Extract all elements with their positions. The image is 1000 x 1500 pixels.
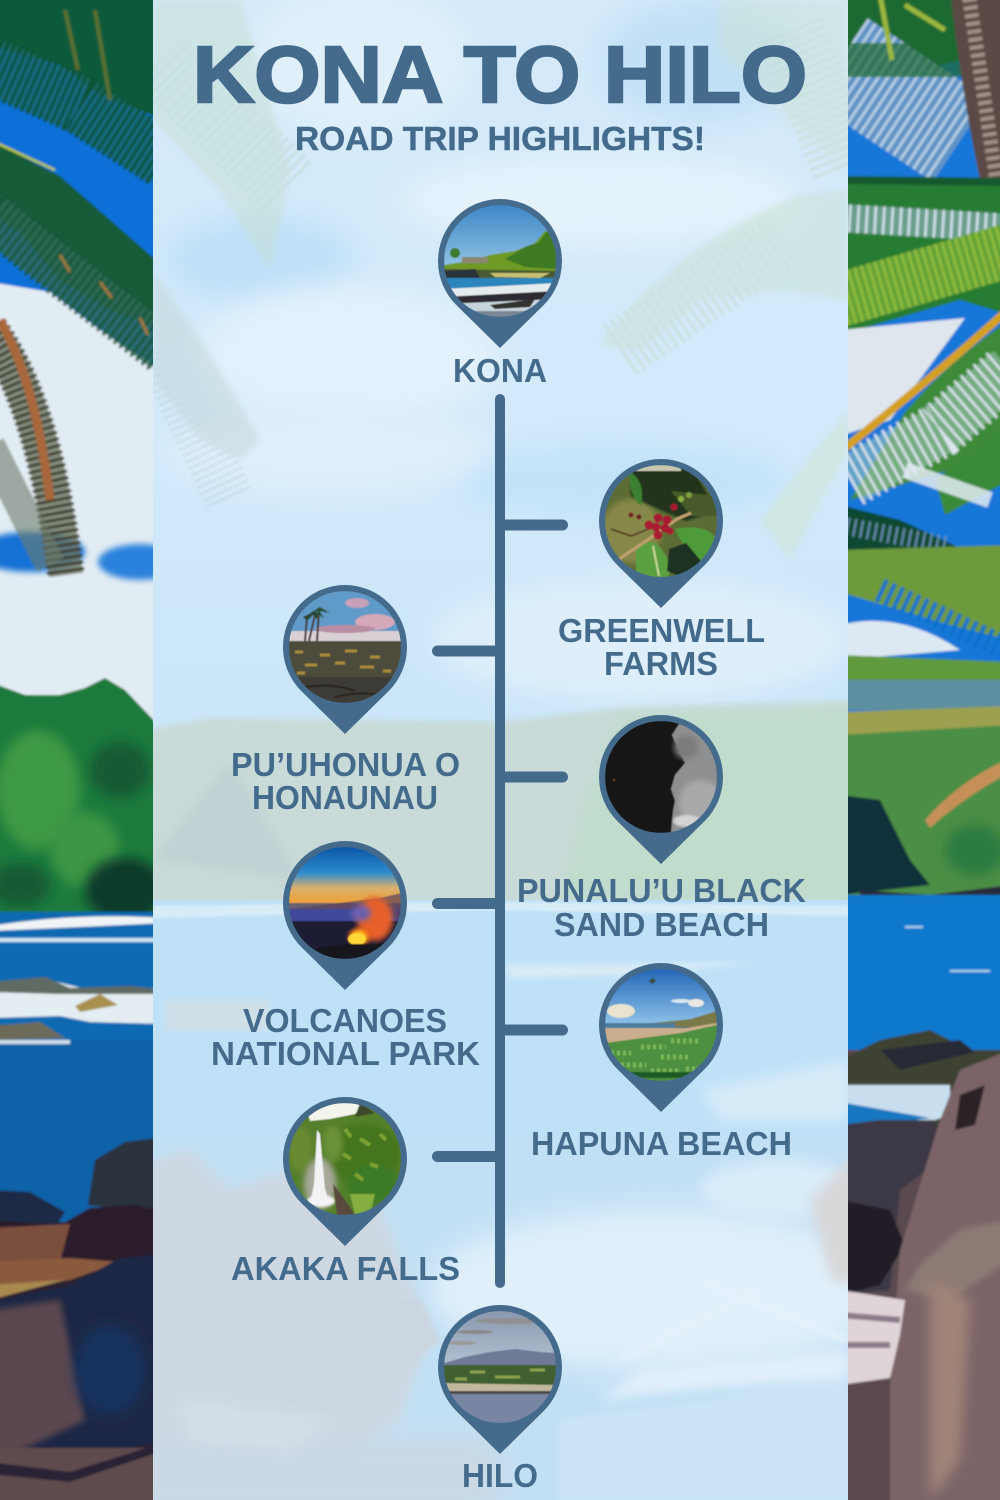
label: PUNALU’U BLACK bbox=[517, 872, 806, 909]
stop: Hilo bbox=[438, 1305, 562, 1494]
stop: Akaka Falls bbox=[231, 1097, 460, 1287]
map pin with black sand and grey surf photo bbox=[599, 715, 723, 864]
map pin with erupting crater photo bbox=[283, 841, 407, 990]
stop: Kona bbox=[438, 199, 562, 389]
stop: Punalu'u Black Sand Beach bbox=[517, 715, 806, 943]
faded palm fronds bbox=[153, 0, 848, 560]
label: KONA bbox=[453, 352, 547, 389]
label: VOLCANOES bbox=[243, 1002, 447, 1039]
map pin with beach and greenery photo bbox=[599, 963, 723, 1112]
map pin with Hilo bay photo bbox=[438, 1305, 562, 1454]
label: GREENWELL bbox=[558, 612, 765, 649]
faded hills bbox=[153, 699, 848, 900]
faded surf bbox=[390, 1333, 848, 1500]
map pin with lava field photo bbox=[283, 585, 407, 734]
label: HONAUNAU bbox=[252, 779, 438, 816]
label: FARMS bbox=[604, 645, 718, 682]
faded rocks bbox=[153, 1151, 420, 1442]
label: PU’UHONUA O bbox=[231, 746, 460, 783]
map pin with waterfall photo bbox=[283, 1097, 407, 1246]
label: HILO bbox=[462, 1457, 538, 1494]
title: KONA TO HILO bbox=[193, 30, 807, 119]
label: AKAKA FALLS bbox=[231, 1250, 460, 1287]
faded sea bbox=[153, 900, 848, 906]
translucent central panel with faded photo bbox=[120, 0, 890, 1500]
stop: Volcanoes National Park bbox=[211, 841, 480, 1072]
stop: Pu'uhonua o Honaunau bbox=[231, 585, 460, 816]
label: NATIONAL PARK bbox=[211, 1035, 480, 1072]
map pin with Kona coast photo bbox=[438, 199, 562, 348]
subtitle: ROAD TRIP HIGHLIGHTS! bbox=[295, 120, 705, 157]
background photo: left palm and coast strip bbox=[0, 0, 153, 1500]
label: HAPUNA BEACH bbox=[531, 1125, 792, 1162]
map pin with coffee cherries photo bbox=[599, 459, 723, 608]
stop: Greenwell Farms bbox=[558, 459, 765, 682]
label: SAND BEACH bbox=[554, 906, 769, 943]
background photo: right palm and coast strip bbox=[840, 0, 1000, 1500]
stop: Hapuna Beach bbox=[531, 963, 792, 1162]
route timeline bbox=[432, 394, 568, 1288]
